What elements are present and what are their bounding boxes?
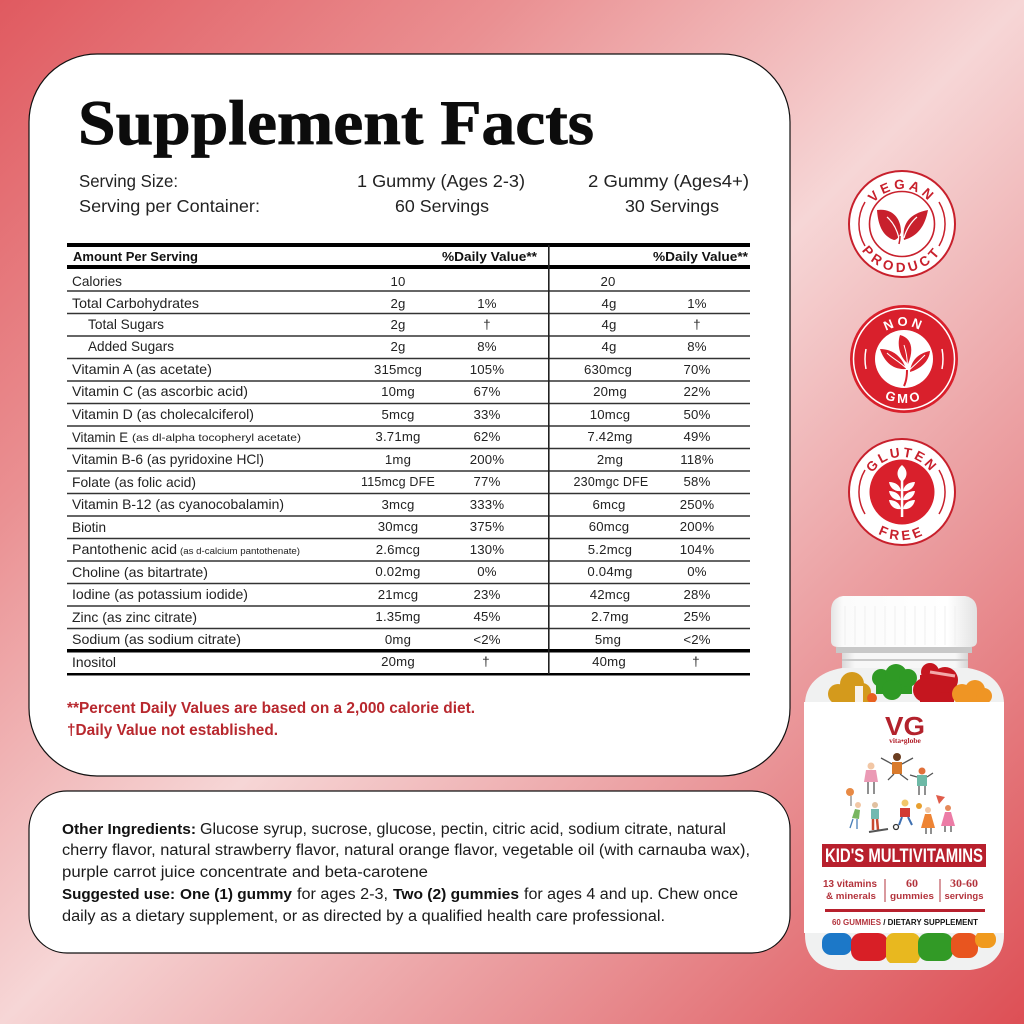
row labels: Vitamin E — [72, 430, 128, 445]
panel: supplement facts — [29, 54, 790, 776]
row labels — [72, 274, 301, 670]
badge: gluten free: FREE — [878, 526, 922, 540]
product stats: 30-60 — [950, 876, 978, 890]
row labels: Zinc (as zinc citrate) — [72, 610, 197, 625]
panel: ingredients and suggested use: Suggested use: — [62, 886, 175, 903]
product name banner: KID'S MULTIVITAMINS — [825, 846, 983, 867]
serving column one values: 0mg — [385, 632, 411, 647]
serving column one values: 200% — [470, 452, 504, 467]
serving column two values: 2mg — [597, 452, 623, 467]
row labels: Folate (as folic acid) — [72, 475, 196, 490]
white label — [804, 702, 1004, 933]
serving column two values: 60mcg — [589, 519, 629, 534]
row labels: Inositol — [72, 655, 116, 670]
serving column two values: 0.04mg — [587, 564, 633, 579]
serving information: 60 Servings — [395, 196, 489, 216]
row labels: Biotin — [72, 520, 106, 535]
serving column two values: 4g — [601, 317, 617, 332]
badge: gluten free — [848, 438, 956, 546]
serving column two values: 42mcg — [590, 587, 630, 602]
gummies at top — [828, 663, 992, 704]
serving column one values: 62% — [474, 429, 501, 444]
footnotes: †Daily Value not established. — [67, 722, 278, 739]
serving column one values: 3mcg — [381, 497, 415, 512]
serving column two values: 28% — [684, 587, 711, 602]
gummies at bottom — [822, 931, 996, 964]
title: Supplement Facts — [78, 87, 594, 158]
panel: ingredients and suggested use: cherry flavor, natural strawberry flavor, natural orange flavor, vegetable oil (with carnauba wax), — [62, 842, 750, 859]
serving information: 30 Servings — [625, 196, 719, 216]
product stats: servings — [944, 891, 984, 902]
badge: vegan product: VEGAN — [867, 180, 934, 200]
row labels: Pantothenic acid — [72, 542, 177, 557]
row labels: Total Carbohydrates — [72, 296, 199, 311]
serving column one values: 115mcg DFE — [361, 475, 435, 489]
row labels: Added Sugars — [88, 339, 174, 354]
panel: ingredients and suggested use: Two (2) gummies — [393, 886, 519, 903]
row labels: Choline (as bitartrate) — [72, 565, 208, 580]
serving column two values: 7.42mg — [587, 429, 633, 444]
serving column two values: 230mgc DFE — [574, 475, 648, 489]
panel: ingredients and suggested use: Other Ingredients: — [62, 821, 196, 838]
serving column two values: 10mcg — [590, 407, 630, 422]
panel: ingredients and suggested use: Glucose syrup, sucrose, glucose, pectin, citric acid, sodium citrate, natural — [200, 821, 726, 838]
serving column one values: 23% — [474, 587, 501, 602]
serving column two values: 5mg — [595, 632, 621, 647]
serving column one values: 5mcg — [381, 407, 415, 422]
serving column two values: 8% — [687, 339, 707, 354]
serving information: Serving Size: — [79, 171, 178, 191]
serving column two values: 4g — [601, 339, 617, 354]
serving column one values: 1% — [477, 296, 497, 311]
product stats: 13 vitamins — [823, 878, 877, 890]
row labels: (as d-calcium pantothenate) — [180, 546, 300, 556]
row labels: Sodium (as sodium citrate) — [72, 632, 241, 647]
serving column two values: 0% — [687, 564, 707, 579]
footnotes: **Percent Daily Values are based on a 2,000 calorie diet. — [67, 700, 475, 717]
row labels: Vitamin C (as ascorbic acid) — [72, 384, 248, 399]
serving column two values: 22% — [684, 384, 711, 399]
serving column one values: 2g — [390, 317, 406, 332]
logo: vita-globe: vita•globe — [889, 736, 922, 745]
badge: vegan product: PRODUCT — [862, 245, 938, 272]
bottle cap — [831, 596, 977, 647]
panel: ingredients and suggested use — [29, 791, 790, 953]
serving column two values: 250% — [680, 497, 714, 512]
serving column two values: <2% — [683, 632, 711, 647]
badge: gluten free: GLUTEN — [867, 448, 936, 471]
serving column one values: 45% — [474, 609, 501, 624]
product descriptor: 60 GUMMIES / DIETARY SUPPLEMENT — [832, 918, 978, 927]
serving column two values: 104% — [680, 542, 714, 557]
serving information: 1 Gummy (Ages 2-3) — [357, 171, 525, 191]
row labels: Vitamin B-6 (as pyridoxine HCl) — [72, 452, 264, 467]
row labels: Calories — [72, 274, 122, 289]
serving column one values: 130% — [470, 542, 504, 557]
serving column one values: 20mg — [381, 654, 415, 669]
panel: ingredients and suggested use: for ages 2-3, — [297, 886, 388, 903]
serving information: Serving per Container: — [79, 196, 260, 216]
serving column one values: 2g — [390, 296, 406, 311]
bottle neck — [836, 647, 972, 671]
serving column two values: 5.2mcg — [588, 542, 632, 557]
serving column one values: 2.6mcg — [376, 542, 420, 557]
logo: vita-globe: VG — [885, 711, 925, 741]
serving column two values: † — [692, 654, 700, 669]
serving column two values: 25% — [684, 609, 711, 624]
serving column one values — [361, 274, 504, 669]
serving column one values: <2% — [473, 632, 501, 647]
serving column one values: 8% — [477, 339, 497, 354]
product stats: 60 — [906, 876, 918, 890]
serving column two values: 6mcg — [592, 497, 626, 512]
serving information — [79, 171, 749, 216]
serving column one values: 3.71mg — [375, 429, 421, 444]
serving column two values: † — [693, 317, 701, 332]
table header: %Daily Value** — [653, 249, 749, 264]
badge: non gmo: GMO — [886, 392, 919, 403]
product stats: gummies — [890, 891, 934, 902]
serving column one values: 105% — [470, 362, 504, 377]
serving column two values: 70% — [684, 362, 711, 377]
serving column one values: † — [482, 654, 490, 669]
serving column one values: 30mcg — [378, 519, 418, 534]
serving column two values: 58% — [684, 474, 711, 489]
serving column two values — [574, 274, 714, 669]
serving column one values: 67% — [474, 384, 501, 399]
row labels: Total Sugars — [88, 317, 164, 332]
serving column two values: 20mg — [593, 384, 627, 399]
badge: non gmo: NON — [883, 317, 922, 330]
panel: ingredients and suggested use: daily as a dietary supplement, or as directed by a qualified health care professional. — [62, 908, 665, 925]
product stats: & minerals — [826, 891, 876, 902]
serving column two values: 49% — [684, 429, 711, 444]
badge: vegan product — [848, 170, 956, 278]
serving column one values: 0.02mg — [375, 564, 421, 579]
serving information: 2 Gummy (Ages4+) — [588, 171, 749, 191]
serving column one values: 333% — [470, 497, 504, 512]
bottle body — [805, 668, 1004, 970]
serving column one values: 10mg — [381, 384, 415, 399]
serving column two values: 200% — [680, 519, 714, 534]
serving column two values: 118% — [680, 452, 714, 467]
panel: ingredients and suggested use: for ages 4 and up. Chew once — [524, 886, 738, 903]
panel: ingredients and suggested use: purple carrot juice concentrate and beta-carotene — [62, 864, 428, 881]
footnotes — [67, 700, 475, 739]
serving column two values: 1% — [687, 296, 707, 311]
serving column two values: 4g — [601, 296, 617, 311]
serving column two values: 40mg — [592, 654, 626, 669]
badge: non gmo — [850, 305, 958, 413]
serving column two values: 630mcg — [584, 362, 632, 377]
serving column one values: 1.35mg — [375, 609, 421, 624]
serving column one values: 77% — [474, 474, 501, 489]
product stats — [823, 876, 984, 902]
row labels: Iodine (as potassium iodide) — [72, 587, 248, 602]
serving column two values: 20 — [600, 274, 616, 289]
product: gummy bottle — [804, 596, 1004, 970]
serving column two values: 2.7mg — [591, 609, 629, 624]
serving column one values: 375% — [470, 519, 504, 534]
serving column one values: 10 — [390, 274, 406, 289]
panel: ingredients and suggested use: One (1) gummy — [180, 886, 293, 903]
table header — [73, 249, 749, 264]
serving column one values: 21mcg — [378, 587, 418, 602]
row labels: Vitamin D (as cholecalciferol) — [72, 407, 254, 422]
row labels: Vitamin A (as acetate) — [72, 362, 212, 377]
serving column one values: † — [483, 317, 491, 332]
serving column one values: 2g — [390, 339, 406, 354]
serving column one values: 33% — [474, 407, 501, 422]
serving column two values: 50% — [684, 407, 711, 422]
row labels: Vitamin B-12 (as cyanocobalamin) — [72, 497, 284, 512]
serving column one values: 1mg — [385, 452, 411, 467]
table header: %Daily Value** — [442, 249, 538, 264]
serving column one values: 315mcg — [374, 362, 422, 377]
nutrition table — [67, 243, 750, 676]
serving column one values: 0% — [477, 564, 497, 579]
row labels: (as dl-alpha tocopheryl acetate) — [132, 433, 301, 444]
table header: Amount Per Serving — [73, 249, 198, 264]
children illustration — [846, 753, 955, 834]
